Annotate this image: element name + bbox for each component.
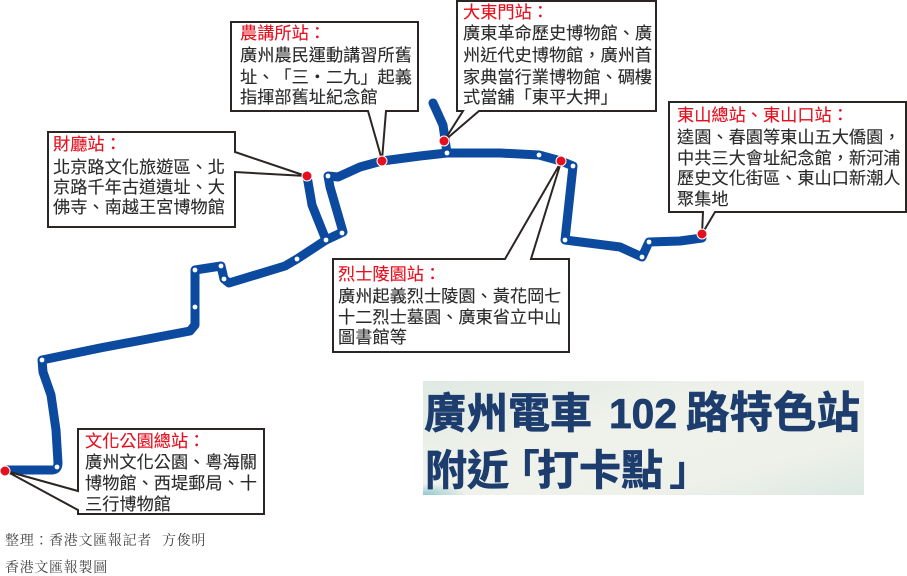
title panel <box>423 381 864 495</box>
callout: Caiting station <box>48 132 306 227</box>
callout: Martyrs Park station <box>333 162 569 352</box>
main route line <box>5 153 702 470</box>
callout: Dadongmen station: 大東門站： <box>463 2 549 22</box>
callout: Wenhua Park terminus: 廣州文化公園、粵海關 <box>85 452 257 472</box>
branch to Dadongmen station <box>433 103 447 153</box>
red station markers <box>0 136 707 476</box>
white stop dots <box>40 151 651 469</box>
route map line <box>5 103 702 470</box>
title text: 102 <box>609 390 677 437</box>
callout: Dadongmen station: 式當舖「東平大押」 <box>463 87 618 107</box>
callout: Caiting station: 京路千年古道遺址、大 <box>53 177 225 197</box>
title text: 附近 <box>425 447 509 494</box>
callout: Dadongmen station: 廣東革命歷史博物館、廣 <box>463 23 652 43</box>
callout: Caiting station: 北京路文化旅遊區、北 <box>53 157 225 177</box>
callout: Dadongmen station: 家典當行業博物館、碉樓 <box>463 67 652 87</box>
callout: Nongjiangsuo station <box>231 22 418 160</box>
title text: 「 <box>498 447 540 494</box>
callout: Dongshan stations <box>669 102 906 234</box>
credit: graphic by: 香港文匯報製圖 <box>5 559 108 576</box>
callout: Martyrs Park station: 烈士陵園站： <box>338 264 441 284</box>
callout: Martyrs Park station: 圖書館等 <box>338 327 407 347</box>
title text: 廣州電車 <box>424 390 592 437</box>
title text <box>424 390 860 494</box>
callout: Martyrs Park station: 廣州起義烈士陵園、黃花岡七 <box>338 286 561 306</box>
callout: Dadongmen station: 州近代史博物館，廣州首 <box>463 45 652 65</box>
credit: compiled by: 整理：香港文匯報記者 <box>5 532 152 549</box>
callout: Dongshan stations: 歷史文化街區、東山口新潮人 <box>677 168 900 188</box>
callout: Nongjiangsuo station: 址、「三・二九」起義 <box>240 67 412 87</box>
callout: Wenhua Park terminus <box>6 429 264 514</box>
callout: Nongjiangsuo station: 廣州農民運動講習所舊 <box>240 45 412 65</box>
credit: compiled by <box>5 532 206 549</box>
callout: Dongshan stations: 聚集地 <box>677 189 729 209</box>
branch to Caiting station <box>307 176 326 240</box>
callout: Wenhua Park terminus: 三行博物館 <box>85 494 171 514</box>
callout: Wenhua Park terminus: 博物館、西堤郵局、十 <box>85 473 257 493</box>
callout: Nongjiangsuo station: 指揮部舊址紀念館 <box>240 87 378 107</box>
callout: Nongjiangsuo station: 農講所站： <box>240 23 326 43</box>
callout: Dongshan stations: 逵園、春園等東山五大僑園， <box>677 127 900 147</box>
callout: Caiting station: 財廳站： <box>53 134 122 154</box>
title text: 」 <box>669 447 711 494</box>
credit: compiled by: 方俊明 <box>162 532 206 549</box>
callout: Caiting station: 佛寺、南越王宮博物館 <box>53 197 225 217</box>
title text: 路特色站 <box>686 390 860 438</box>
callout: Dongshan stations: 東山總站、東山口站： <box>677 105 849 125</box>
callout: Dongshan stations: 中共三大會址紀念館，新河浦 <box>677 148 900 168</box>
title text: 打卡點 <box>537 447 663 494</box>
callout: Martyrs Park station: 十二烈士墓園、廣東省立中山 <box>338 307 561 327</box>
callout: Dadongmen station <box>444 1 656 141</box>
callout: Wenhua Park terminus: 文化公園總站： <box>85 431 205 451</box>
